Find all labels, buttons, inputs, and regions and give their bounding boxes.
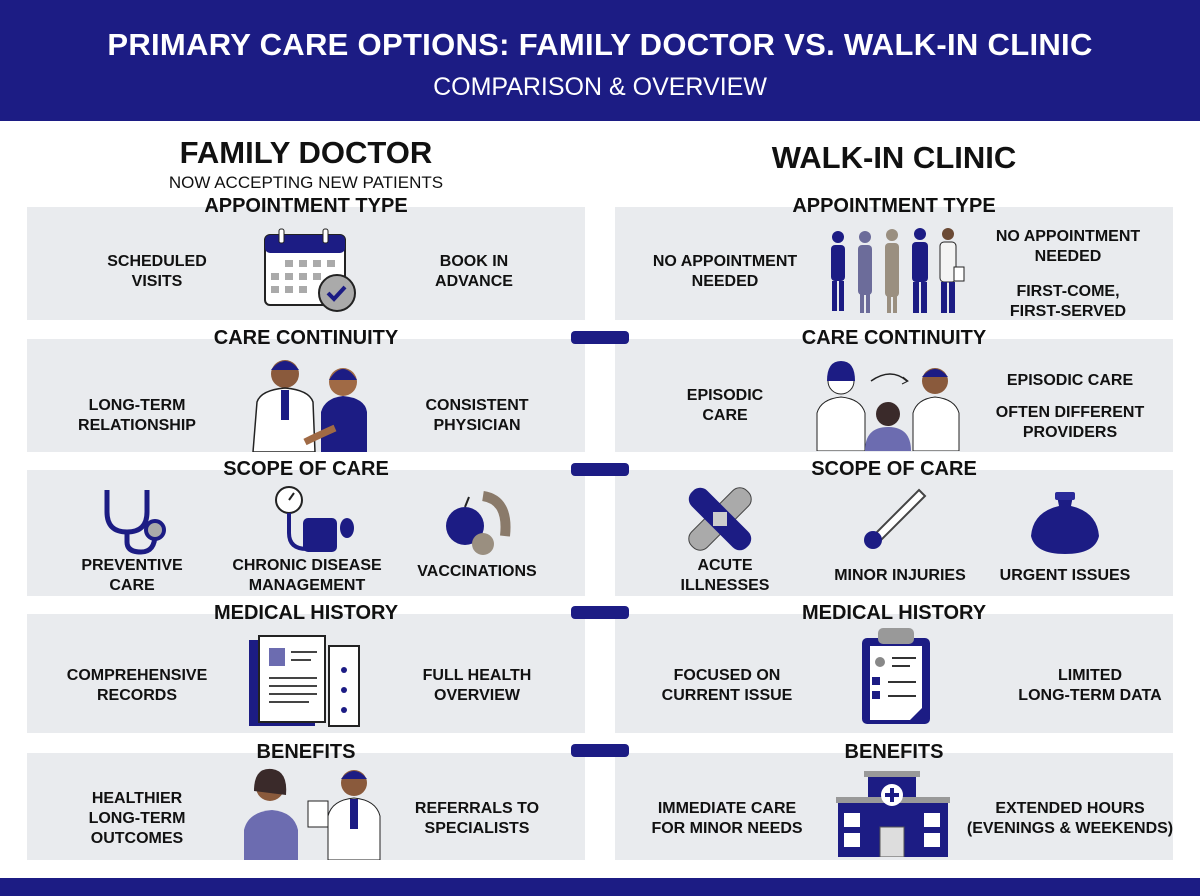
text: BENEFITS <box>845 741 943 763</box>
panel: FD medical history: FULL HEALTH <box>423 667 531 684</box>
panel: FD appointment type: SCHEDULED <box>107 253 207 270</box>
panel: FD benefits: REFERRALS TO <box>415 800 539 817</box>
connector tab <box>571 606 629 619</box>
footer bar <box>0 878 1200 896</box>
panel: WC medical history: FOCUSED ON <box>674 667 780 684</box>
text: BENEFITS <box>257 741 355 763</box>
panel: FD benefits: HEALTHIER <box>92 790 182 807</box>
text: CARE CONTINUITY <box>214 327 398 349</box>
header: PRIMARY CARE OPTIONS: FAMILY DOCTOR VS. WALK-IN CLINIC <box>107 27 1093 62</box>
icon: clinic building <box>836 771 950 857</box>
panel: WC scope of care <box>615 470 1173 596</box>
panel: WC care continuity: EPISODIC CARE <box>1007 372 1133 389</box>
panel: FD benefits: SPECIALISTS <box>425 820 529 837</box>
text: COMPREHENSIVE <box>67 667 207 684</box>
panel: FD appointment type: BOOK IN <box>440 253 508 270</box>
panel: FD scope of care: CHRONIC DISEASE <box>232 557 382 574</box>
panel: WC appointment type: NEEDED <box>692 273 758 290</box>
text: SCOPE OF CARE <box>811 458 977 480</box>
icon: clipboard <box>862 628 930 724</box>
icon: bandage <box>688 487 752 551</box>
panel: WC benefits: IMMEDIATE CARE <box>658 800 796 817</box>
panel: WC benefits: FOR MINOR NEEDS <box>651 820 803 837</box>
text: MEDICAL HISTORY <box>214 602 398 624</box>
panel: FD benefits <box>27 753 585 860</box>
icon: patient and doctor <box>244 768 380 860</box>
panel: WC scope of care: MINOR INJURIES <box>834 567 966 584</box>
panel: WC care continuity <box>615 339 1173 452</box>
panel: WC benefits <box>615 753 1173 860</box>
panel: WC care continuity: PROVIDERS <box>1023 424 1117 441</box>
icon: calendar <box>264 228 356 312</box>
heading: family doctor: NOW ACCEPTING NEW PATIENTS <box>169 173 443 192</box>
connector tab <box>571 744 629 757</box>
connector tab <box>571 463 629 476</box>
panel: WC scope of care: ACUTE <box>697 557 753 574</box>
text: SCOPE OF CARE <box>223 458 389 480</box>
text: APPOINTMENT TYPE <box>792 195 996 217</box>
panel: WC medical history <box>615 614 1173 733</box>
panel: FD care continuity: RELATIONSHIP <box>78 417 196 434</box>
text: RECORDS <box>97 687 177 704</box>
icon: thermometer <box>864 488 926 549</box>
panel: FD scope of care: MANAGEMENT <box>249 577 365 594</box>
icon: stethoscope <box>104 490 166 554</box>
panel: WC benefits: (EVENINGS & WEEKENDS) <box>967 820 1173 837</box>
panel: FD appointment type <box>27 207 585 320</box>
panel: FD scope of care: CARE <box>109 577 155 594</box>
icon: queue of people <box>831 228 964 313</box>
panel: FD medical history <box>27 614 585 733</box>
panel: WC scope of care: ILLNESSES <box>681 577 769 594</box>
panel: FD appointment type: VISITS <box>132 273 182 290</box>
panel: WC appointment type: FIRST-COME, <box>1016 283 1120 300</box>
panel: WC appointment type: NO APPOINTMENT <box>996 228 1140 245</box>
panel: WC appointment type: NO APPOINTMENT <box>653 253 797 270</box>
panel: FD care continuity: LONG-TERM <box>89 397 185 414</box>
icon: doctor shaking hands <box>252 360 367 452</box>
panel: FD scope of care: VACCINATIONS <box>417 563 537 580</box>
icon: different providers <box>816 361 960 451</box>
panel: FD medical history: OVERVIEW <box>434 687 520 704</box>
panel: WC appointment type: NEEDED <box>1035 248 1101 265</box>
panel: FD appointment type: ADVANCE <box>435 273 513 290</box>
heading: family doctor <box>169 135 443 192</box>
icon: ice pack <box>1031 492 1099 554</box>
text <box>67 667 207 704</box>
panel: WC appointment type: FIRST-SERVED <box>1010 303 1126 320</box>
panel: WC care continuity: OFTEN DIFFERENT <box>996 404 1144 421</box>
panel: WC appointment type <box>615 207 1173 320</box>
panel: FD scope of care <box>27 470 585 596</box>
panel: WC medical history: LONG-TERM DATA <box>1018 687 1162 704</box>
header <box>0 0 1200 121</box>
panel: FD care continuity: PHYSICIAN <box>433 417 521 434</box>
heading: family doctor: FAMILY DOCTOR <box>180 135 432 170</box>
icon: fruit <box>446 491 510 555</box>
header: COMPARISON & OVERVIEW <box>433 73 767 101</box>
panel: FD care continuity: CONSISTENT <box>425 397 529 414</box>
panel: WC medical history: CURRENT ISSUE <box>662 687 792 704</box>
panel: WC benefits: EXTENDED HOURS <box>995 800 1145 817</box>
panel: FD benefits: OUTCOMES <box>91 830 183 847</box>
text: APPOINTMENT TYPE <box>204 195 408 217</box>
panel: FD scope of care: PREVENTIVE <box>81 557 183 574</box>
panel: FD benefits: LONG-TERM <box>89 810 185 827</box>
panel: WC care continuity: EPISODIC <box>687 387 763 404</box>
text: CARE CONTINUITY <box>802 327 986 349</box>
panel: WC care continuity: CARE <box>702 407 748 424</box>
icon: records <box>249 635 360 727</box>
icon: blood pressure gauge <box>275 486 354 552</box>
panel: WC scope of care: URGENT ISSUES <box>1000 567 1130 584</box>
panel: FD care continuity <box>27 339 585 452</box>
text: MEDICAL HISTORY <box>802 602 986 624</box>
connector tab <box>571 331 629 344</box>
panel: WC medical history: LIMITED <box>1058 667 1122 684</box>
heading: walk-in clinic: WALK-IN CLINIC <box>772 140 1016 175</box>
